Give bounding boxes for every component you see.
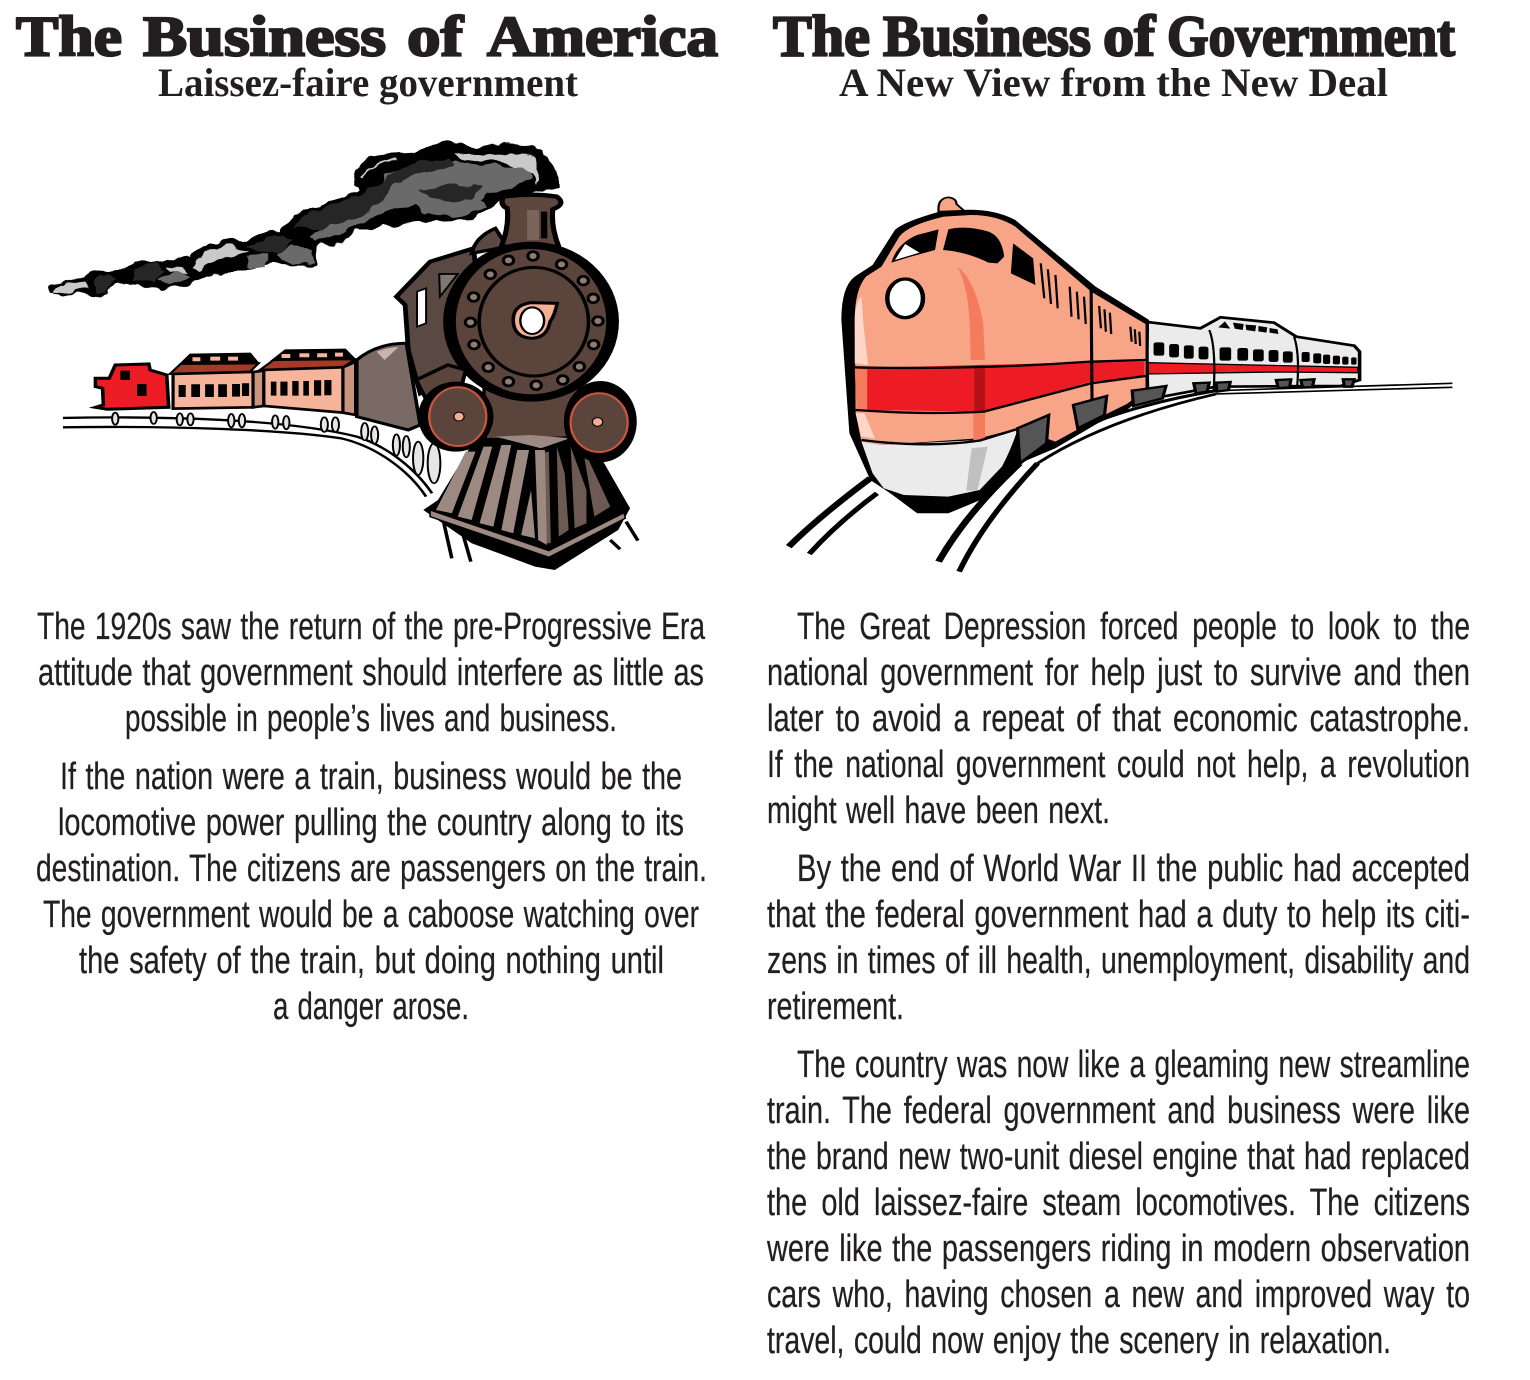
cowcatcher	[423, 435, 630, 570]
title: The Business of America	[16, 6, 718, 68]
passenger car 1	[170, 354, 264, 409]
paragraph: the great depression: might well have been next.	[767, 790, 1110, 832]
rails	[789, 383, 1452, 572]
paragraph: if the nation were a train: destination. The citizens are passengers on the train.	[36, 848, 707, 890]
paragraph: if the nation were a train	[36, 756, 707, 1028]
smokestack	[501, 195, 561, 247]
title: The Business of America: The	[16, 6, 122, 68]
title: The Business of America: of	[407, 6, 464, 68]
paragraph: by the end of world war ii	[767, 848, 1470, 1028]
subtitle: A New View from the New Deal: A New View from the New Deal	[839, 60, 1388, 105]
diesel locomotive body	[841, 197, 1149, 513]
roof horn	[938, 197, 964, 212]
title: The Business of Government: of	[1103, 4, 1156, 68]
undercarriage trucks	[1018, 379, 1354, 463]
title: The Business of Government: Business	[883, 4, 1091, 68]
panel: new deal column	[766, 4, 1470, 1362]
title: The Business of Government: The	[773, 4, 870, 68]
paragraph: if the nation were a train: The government would be a caboose watching over	[43, 894, 699, 936]
body text: new deal	[766, 606, 1470, 1362]
paragraph: the 1920s	[37, 606, 706, 740]
title: The Business of Government: Government	[1167, 4, 1456, 68]
paragraph: if the nation were a train: locomotive power pulling the country along to its	[58, 802, 684, 844]
side vents	[1041, 263, 1140, 346]
driving wheels	[418, 381, 637, 462]
paragraph: if the nation were a train: If the nation were a train, business would be the	[60, 756, 682, 798]
paragraph: if the nation were a train: a danger arose.	[273, 986, 469, 1028]
title: The Business of America: America	[487, 6, 718, 68]
paragraph: the 1920s: attitude that government should interfere as little as	[38, 652, 704, 694]
boiler front with rivets	[443, 242, 619, 402]
locomotive cab	[396, 228, 507, 393]
smoke plume	[48, 142, 559, 298]
paragraph: if the nation were a train: the safety of the train, but doing nothing until	[79, 940, 664, 982]
smoke chest between wheels	[484, 377, 579, 440]
paragraph: the great depression	[767, 606, 1470, 832]
caboose	[95, 364, 169, 409]
panel: laissez-faire column	[16, 6, 718, 1028]
body text: laissez-faire government	[36, 606, 707, 1028]
car wheels	[112, 412, 440, 483]
observation cars	[1145, 317, 1360, 397]
rails	[63, 417, 432, 497]
passenger car 2	[260, 350, 356, 415]
paragraph: the 1920s: The 1920s saw the return of the pre-Progressive Era	[37, 606, 706, 648]
tender	[357, 343, 420, 430]
paragraph: the country was now	[766, 1044, 1470, 1362]
title: The Business of America: Business	[143, 6, 386, 68]
cowcatcher struts	[444, 522, 638, 562]
windshield and side windows	[891, 228, 1035, 285]
subtitle: Laissez-faire government: Laissez-faire government	[158, 60, 579, 105]
headlight	[887, 279, 923, 318]
illustration: steam locomotive pulling cars and caboose	[48, 142, 638, 570]
smoke box brace	[416, 365, 466, 403]
illustration: streamline diesel train	[789, 197, 1452, 572]
paragraph: the 1920s: possible in people’s lives and business.	[125, 698, 617, 740]
title: The Business of Government	[773, 4, 1456, 68]
paragraph: by the end of world war ii: retirement.	[767, 986, 904, 1028]
